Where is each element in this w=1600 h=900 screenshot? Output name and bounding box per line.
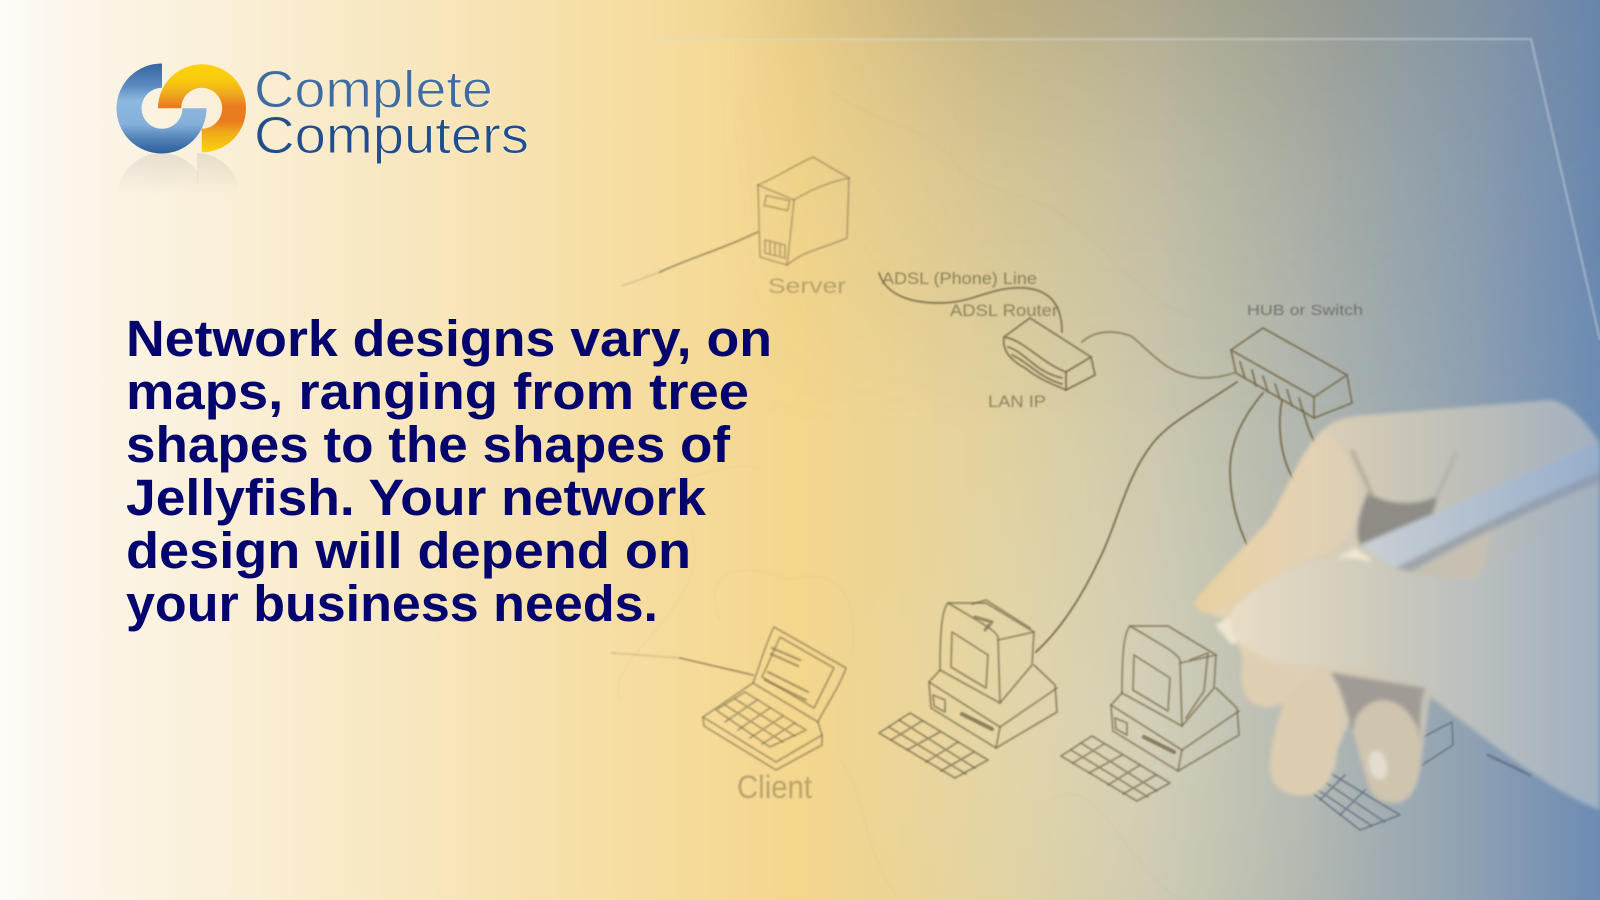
finger crease right xyxy=(1436,452,1456,498)
icon: hand holding pen xyxy=(1195,400,1600,810)
pen xyxy=(1360,442,1600,568)
label: HUB or Switch: HUB or Switch xyxy=(1247,302,1363,319)
icon: logo yellow arc xyxy=(158,64,246,152)
main statement text: Jellyfish. Your network xyxy=(126,469,707,526)
main statement text: Network designs vary, on xyxy=(126,310,772,367)
lower finger two xyxy=(1354,700,1420,803)
icon: ADSL router xyxy=(1004,318,1095,390)
sketch labels xyxy=(737,269,1363,805)
main statement text: shapes to the shapes of xyxy=(126,416,731,473)
ADSL phone line xyxy=(879,273,1062,332)
main statement text: maps, ranging from tree xyxy=(126,363,749,420)
shadow between fingers xyxy=(1357,492,1438,548)
main statement text xyxy=(126,310,772,632)
lower finger one xyxy=(1270,679,1339,796)
gap below palm xyxy=(1330,672,1425,745)
pen shadow xyxy=(1395,472,1600,572)
icon: logo reflection xyxy=(117,153,240,195)
icon: server tower xyxy=(622,157,849,286)
icon: hub or switch xyxy=(1231,328,1352,418)
finger crease left xyxy=(1352,450,1372,496)
finger below pen xyxy=(1405,505,1500,588)
logo wordmark line two: Computers xyxy=(254,107,529,165)
icon: desktop computer two xyxy=(1061,626,1239,801)
index finger tan tone xyxy=(1195,430,1358,613)
label: Server: Server xyxy=(768,275,846,298)
label: Client: Client xyxy=(737,769,812,805)
light area in lower centre xyxy=(800,420,1440,900)
main statement text: your business needs. xyxy=(126,575,658,632)
logo wordmark line one: Complete xyxy=(254,61,493,119)
small finger knuckle xyxy=(1242,657,1300,707)
faint map lines xyxy=(618,90,1200,900)
icon: desktop computer three, behind hand xyxy=(1315,722,1530,830)
front of hand and thumb xyxy=(1230,495,1600,810)
hand mass xyxy=(1195,400,1600,810)
fingernail highlight xyxy=(1365,748,1391,782)
icon: desktop computer one xyxy=(879,600,1057,778)
label: LAN IP: LAN IP xyxy=(988,392,1046,411)
cables: hub to computers xyxy=(1036,382,1316,652)
icon: logo blue arc xyxy=(117,63,207,153)
logo xyxy=(117,61,529,195)
pen tip xyxy=(1215,548,1372,645)
label: ADSL router: ADSL Router xyxy=(950,301,1058,320)
cable: router to hub xyxy=(1082,332,1234,378)
network sketch xyxy=(612,157,1530,830)
icon: laptop client xyxy=(612,627,846,770)
label: ADSL line: ADSL (Phone) Line xyxy=(882,269,1037,288)
paper edge and top band xyxy=(640,0,1600,340)
upper shading of the photo xyxy=(778,0,1552,274)
main statement text: design will depend on xyxy=(126,522,691,579)
